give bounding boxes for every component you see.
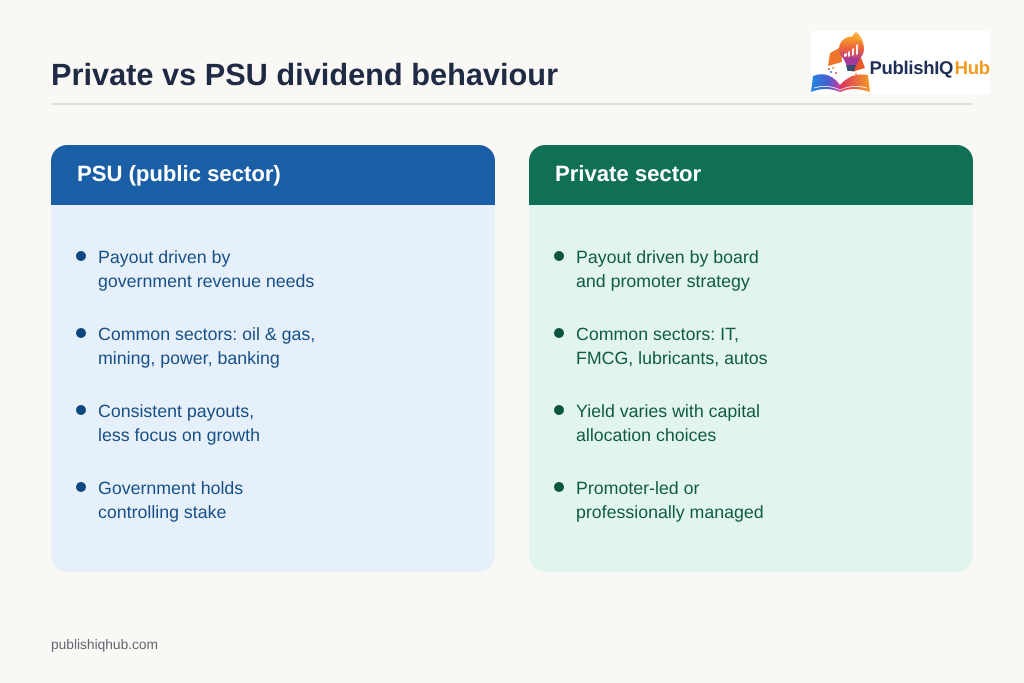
panel heading: Private bbox=[529, 145, 973, 205]
panel heading: Private: Private sector bbox=[555, 161, 701, 186]
bullet: management bbox=[554, 478, 764, 522]
bullet: government stake: Government holds bbox=[98, 478, 243, 498]
panel heading: PSU: PSU (public sector) bbox=[77, 161, 281, 186]
panel: PSU (public sector) bbox=[51, 145, 495, 572]
bullet: payout driver bbox=[76, 247, 314, 291]
bullet: common sectors bbox=[76, 324, 315, 368]
bullet: common sectors: FMCG, lubricants, autos bbox=[576, 348, 768, 368]
bullet: yield: Yield varies with capital bbox=[576, 401, 760, 421]
bullet: payout driver: Payout driven by bbox=[98, 247, 230, 267]
panel: Private sector bbox=[529, 145, 973, 572]
bullet: management: professionally managed bbox=[576, 502, 764, 522]
bullet: payout driver: government revenue needs bbox=[98, 271, 314, 291]
bullet: payout driver: and promoter strategy bbox=[576, 271, 750, 291]
bullet: consistent payouts: less focus on growth bbox=[98, 425, 260, 445]
bullet: management: Promoter-led or bbox=[576, 478, 699, 498]
icon: rocket bulb over book bbox=[811, 32, 870, 92]
bullet: common sectors: mining, power, banking bbox=[98, 348, 280, 368]
bullet: government stake: controlling stake bbox=[98, 502, 226, 522]
bullet: common sectors: Common sectors: oil & gas, bbox=[98, 324, 315, 344]
bullet: yield bbox=[554, 401, 760, 445]
logo wordmark: PublishIQHub bbox=[870, 57, 990, 78]
bullet: common sectors bbox=[554, 324, 768, 368]
bullet: payout driver: Payout driven by board bbox=[576, 247, 759, 267]
title: Private vs PSU dividend behaviour bbox=[51, 57, 558, 92]
bullet: consistent payouts bbox=[76, 401, 260, 445]
bullet: payout driver bbox=[554, 247, 759, 291]
bullet: yield: allocation choices bbox=[576, 425, 716, 445]
panel heading: PSU bbox=[51, 145, 495, 205]
bullet: common sectors: Common sectors: IT, bbox=[576, 324, 739, 344]
bullet: government stake bbox=[76, 478, 243, 522]
bullet: consistent payouts: Consistent payouts, bbox=[98, 401, 254, 421]
logo: PublishIQ Hub bbox=[811, 31, 990, 94]
footer: site URL: publishiqhub.com bbox=[51, 637, 158, 652]
